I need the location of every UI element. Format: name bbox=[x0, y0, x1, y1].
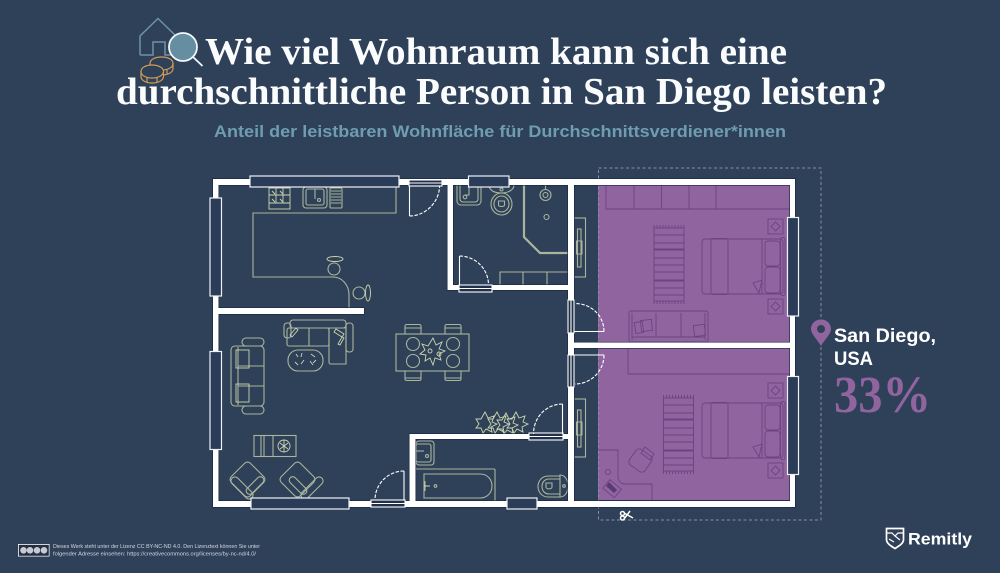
title: Wie viel Wohnraum kann sich eine bbox=[205, 31, 787, 73]
cut line: dashed boundary bbox=[598, 168, 821, 520]
licence text: folgender Adresse einsehen: https://creativecommons.org/licenses/by-nc-nd/4.0/ bbox=[53, 552, 257, 558]
icon: house, magnifier and coins bbox=[140, 18, 202, 83]
walls bbox=[213, 179, 795, 507]
side table with plant bbox=[254, 436, 296, 456]
icon: scissors bbox=[620, 511, 633, 520]
bathroom furniture bbox=[457, 180, 568, 285]
armchair left bbox=[228, 460, 267, 501]
armchair right bbox=[278, 460, 325, 501]
location label: San Diego, bbox=[834, 326, 936, 347]
location label: USA bbox=[834, 349, 873, 370]
bedroom 1 furniture bbox=[606, 185, 790, 342]
licence text bbox=[53, 544, 260, 558]
plants row bbox=[476, 412, 528, 434]
title bbox=[116, 31, 887, 113]
dining table bbox=[396, 324, 469, 380]
second bathroom furniture bbox=[416, 441, 568, 501]
percentage: 33% bbox=[834, 367, 931, 424]
coffee table bbox=[288, 350, 323, 371]
windows bbox=[210, 176, 798, 509]
sofa bbox=[284, 320, 353, 364]
kitchen furniture bbox=[253, 185, 396, 308]
hallway closet lower bbox=[574, 399, 586, 457]
affordable area highlight bbox=[598, 185, 790, 500]
licence text: Dieses Werk steht unter der Lizenz CC BY-NC-ND 4.0. Den Lizenztext können Sie unter bbox=[53, 544, 260, 550]
icon: location pin bbox=[811, 320, 831, 346]
doors bbox=[371, 180, 604, 507]
armless sofa left bbox=[231, 338, 264, 414]
licence badge bbox=[18, 544, 50, 556]
logo: Remitly: Remitly bbox=[908, 530, 973, 548]
title: durchschnittliche Person in San Diego leisten? bbox=[116, 71, 887, 113]
subtitle: Anteil der leistbaren Wohnfläche für Durchschnittsverdiener*innen bbox=[214, 122, 786, 141]
hallway closet upper bbox=[574, 218, 586, 277]
bedroom 2 furniture bbox=[598, 348, 790, 500]
location label bbox=[834, 326, 936, 370]
logo: Remitly bbox=[886, 528, 973, 548]
